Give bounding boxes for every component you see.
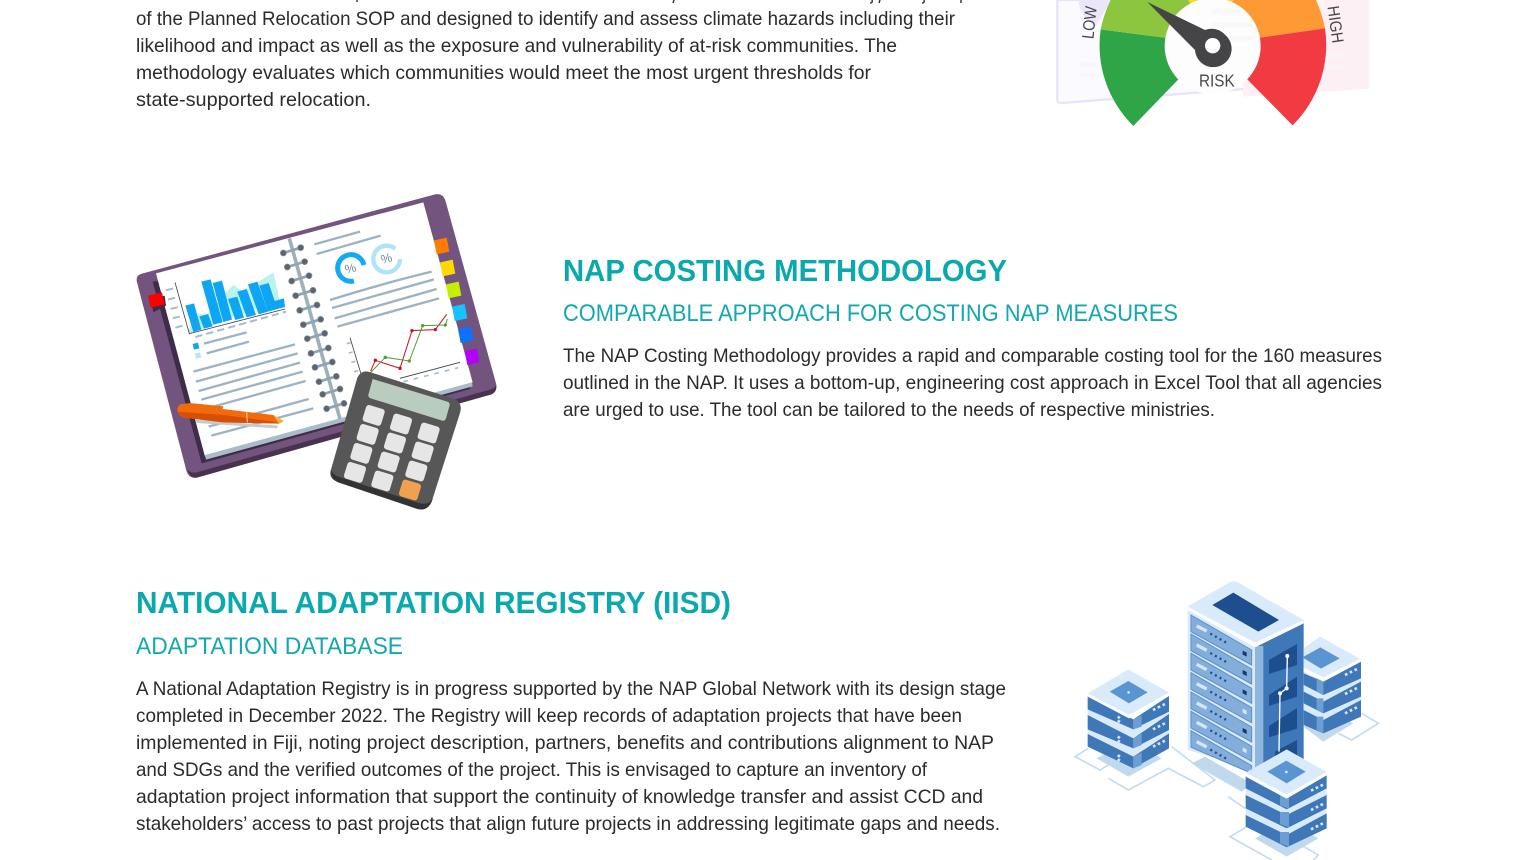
gauge labels: HIGH <box>1323 5 1347 44</box>
icon: risk gauge <box>1057 0 1370 126</box>
pen <box>177 403 284 428</box>
text block: registry description: and SDGs and the verified outcomes of the project. This is envisaged to capture an inventory of <box>136 759 928 781</box>
gauge labels: LOW <box>1078 5 1101 40</box>
gauge labels: RISK <box>1199 71 1235 91</box>
heading: National Adaptation Registry: NATIONAL ADAPTATION REGISTRY (IISD) <box>136 585 731 620</box>
text block: risk methodology description: methodology evaluates which communities would meet the most urgent thresholds for <box>136 62 872 84</box>
text block: registry description: completed in December 2022. The Registry will keep records of adaptation projects that have been <box>136 705 962 727</box>
text lines on pages <box>193 232 439 436</box>
text block: NAP costing description: are urged to use. The tool can be tailored to the needs of respective ministries. <box>563 399 1215 421</box>
calculator <box>330 371 461 510</box>
text block: NAP costing description: The NAP Costing Methodology provides a rapid and comparable costing tool for the 160 measures <box>563 345 1382 367</box>
donut charts: % <box>379 250 394 267</box>
heading: NAP costing methodology: NAP COSTING METHODOLOGY <box>563 253 1007 288</box>
text block: risk methodology description: of the Planned Relocation SOP and designed to identify and assess climate hazards including their <box>136 8 955 30</box>
text block: risk methodology description: likelihood and impact as well as the exposure and vulnerability of at-risk communities. The <box>136 35 897 57</box>
icon: database servers <box>1075 581 1378 860</box>
right stack <box>1302 637 1361 733</box>
spine <box>289 238 340 419</box>
shadows <box>1097 740 1162 777</box>
line chart <box>347 314 460 382</box>
text block: registry description: stakeholders’ access to past projects that align future projects in addressing legitimate gaps and needs. <box>136 813 1000 835</box>
donut charts: % <box>343 260 358 277</box>
subheading: adaptation database: ADAPTATION DATABASE <box>136 633 403 660</box>
text block: registry description: implemented in Fiji, noting project description, partners, benefits and contributions alignment to NAP <box>136 732 994 754</box>
left stack <box>1088 669 1169 768</box>
text block: risk methodology description: state-supported relocation. <box>136 89 371 111</box>
text block: registry description: adaptation project information that support the continuity of knowledge transfer and assist CCD and <box>136 786 983 808</box>
notebook pages <box>156 202 473 457</box>
text block: registry description <box>136 678 1006 835</box>
text block: NAP costing description: outlined in the NAP. It uses a bottom-up, engineering cost approach in Excel Tool that all agencies <box>563 372 1382 394</box>
front stack <box>1246 749 1327 847</box>
icon: notebook with calculator and pen <box>137 194 496 510</box>
connectors <box>1279 655 1289 752</box>
text block: NAP costing description <box>563 345 1382 421</box>
gauge needle <box>1147 2 1232 67</box>
bar chart <box>166 272 286 337</box>
notebook cover <box>137 194 496 478</box>
central tower <box>1188 581 1304 773</box>
gauge segments <box>1100 0 1326 126</box>
text block: registry description: A National Adaptation Registry is in progress supported by the NAP Global Network with its design stage <box>136 678 1006 700</box>
network lines <box>1075 713 1378 860</box>
rings <box>280 245 347 412</box>
gauge labels <box>1078 5 1347 91</box>
text block: risk methodology description <box>136 0 961 111</box>
donut charts <box>338 246 400 281</box>
subheading: costing approach: COMPARABLE APPROACH FOR COSTING NAP MEASURES <box>563 300 1178 327</box>
index tabs <box>148 238 479 365</box>
